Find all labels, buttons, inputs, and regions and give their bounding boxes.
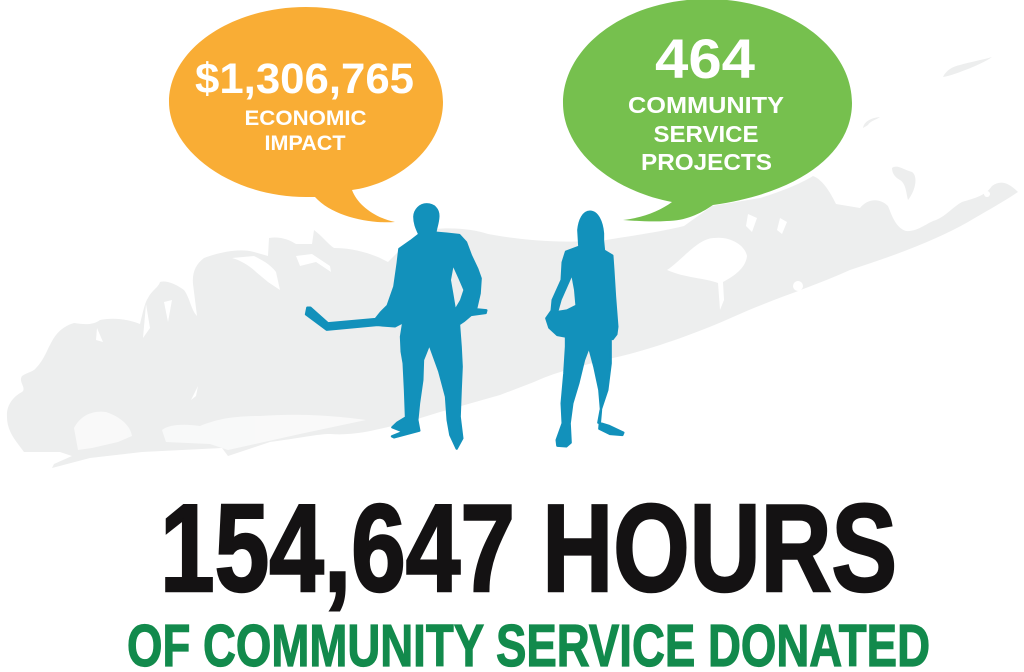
map: south shore marshes <box>74 412 366 450</box>
silhouette: female athlete with ball <box>546 212 623 446</box>
label: economic impact <box>244 107 366 155</box>
map: Long Island silhouette <box>7 57 1018 468</box>
stat: project count: 464 <box>655 27 755 90</box>
speech bubble: economic impact <box>169 7 443 222</box>
speech bubble: community service projects <box>563 0 852 221</box>
label: economic impact: ECONOMIC <box>244 107 366 130</box>
label: community service projects: PROJECTS <box>641 149 772 175</box>
label: community service projects: SERVICE <box>654 121 758 147</box>
silhouette: hockey player <box>306 204 486 449</box>
label: community service projects: COMMUNITY <box>628 92 784 118</box>
stat: economic impact amount: $1,306,765 <box>195 55 414 103</box>
map: offshore islands <box>863 57 992 200</box>
label: economic impact: IMPACT <box>264 132 346 155</box>
map: bays and inlets <box>96 191 990 400</box>
label: community service projects <box>628 92 784 175</box>
